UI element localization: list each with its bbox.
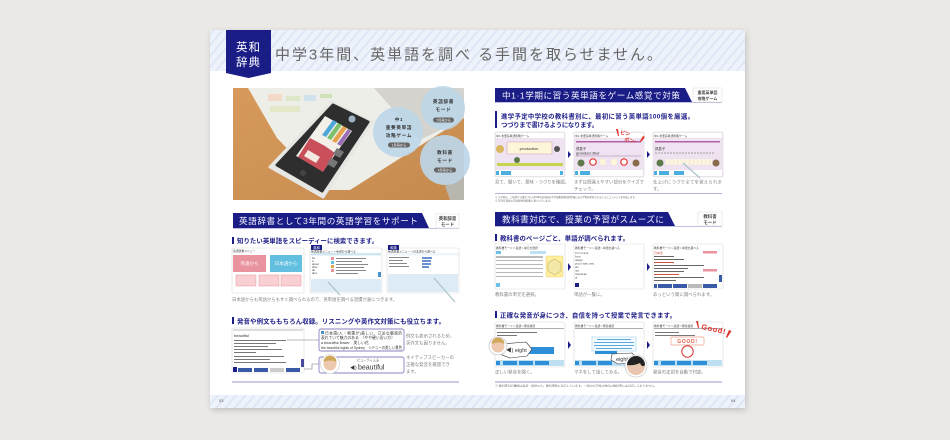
screen: dictionary menu: 英語辞書メニュー — [233, 249, 256, 253]
callout: audio — [319, 354, 404, 374]
page number right: 04 — [731, 398, 736, 403]
top hatched band — [210, 30, 745, 71]
mode circle: dictionary: 7月号から — [436, 118, 451, 122]
pronunciation screen 3: 教科書モード＞英語＞発音練習 — [654, 324, 693, 328]
textbook screen 2: American — [575, 272, 587, 276]
mode circle: textbook: 4月号から — [438, 168, 452, 172]
section header: game: 攻略ゲーム — [698, 95, 717, 101]
exclamation: Good!: Good! — [701, 322, 727, 336]
section header: textbook: モード — [703, 220, 717, 225]
textbook screen 3: 日本語 — [654, 251, 663, 255]
game screen 3 — [653, 132, 723, 178]
arrow — [647, 151, 650, 158]
game screen 2: 中1·重要英単語攻略ゲーム — [575, 134, 608, 138]
caption: pronunciation 1: 正しい発音を聞く。 — [495, 368, 535, 376]
mode circle: game: 1月号から — [392, 142, 406, 148]
mode circle: textbook — [420, 135, 470, 185]
textbook screen 2: am — [575, 265, 580, 269]
subheading: 100 words: 進学予定中学校の教科書別に、最初に習う英単語100個を厳選。 — [501, 112, 694, 120]
photo with device and mode circles — [233, 86, 470, 200]
divider right — [495, 381, 722, 383]
screen: dictionary entry: beautiful — [234, 333, 249, 338]
arrow — [647, 263, 650, 271]
caption: pronunciation 3: 発音の正誤を自動で判定。 — [653, 368, 706, 376]
subheading: textbook pages: 教科書のページごと、単語が調べられます。 — [500, 234, 629, 242]
screen: English-Japanese search: be — [312, 256, 316, 260]
photo: paper shade right — [374, 88, 464, 140]
note: example sentences: 英作文も困りません。 — [406, 340, 450, 346]
note: native pronunciation: ます。 — [406, 368, 419, 375]
game screen 2 — [574, 132, 644, 177]
pronunciation screen 1 — [489, 322, 565, 367]
caption: game 3 — [653, 178, 722, 192]
caption: textbook 2: 単語が一覧に。 — [574, 291, 605, 298]
exclamation: Good! — [696, 321, 732, 338]
callout: audio: ビューティふる — [357, 358, 379, 362]
brochure page — [210, 30, 745, 408]
section header: dictionary support: モード — [441, 222, 454, 227]
photo: table shade — [445, 176, 464, 200]
main title: 中学3年間、英単語を調べ る手間を取らせません。 — [275, 46, 662, 64]
caption: game 1: 見て、聞いて、意味・つづりを確認。 — [495, 178, 569, 186]
game screen 2: grandso□ther — [576, 150, 600, 156]
game screen 1: production — [520, 146, 538, 151]
footnote: game: ※ 入学前は、ご採用から推定される2016年度全国の中学校教科書採択情報におき学習を進められるようにコンテンツを作成します。 — [495, 195, 637, 199]
screen: English-Japanese search — [310, 245, 382, 293]
textbook screen 3 — [653, 244, 723, 289]
screen: English-Japanese search: a — [312, 259, 314, 263]
pronunciation screen 2 — [574, 322, 647, 377]
screen: English-Japanese search: after — [312, 265, 318, 269]
screen: dictionary menu: 英語から — [240, 260, 258, 267]
textbook screen 2: from — [575, 254, 581, 258]
callout: audio: beautiful — [358, 364, 385, 372]
arrow — [568, 263, 571, 271]
mode circle: game — [373, 107, 423, 157]
note: native pronunciation — [406, 354, 454, 375]
footnote: textbook: ※ 教科書対応機能は英語・国語のみ。教科書順に対応しています。一部の中学校の独自の教科書には対応しておりません。 — [495, 384, 657, 388]
section header: textbook — [495, 212, 722, 227]
game screen 3: 孫息子 — [655, 146, 666, 151]
exclamation: correct sound: ピン — [620, 130, 631, 138]
section header: dictionary support: 英語辞書として3年間の英語学習をサポート — [239, 215, 418, 226]
section header: textbook: 教科書 — [703, 213, 717, 220]
pronunciation screen 1: ◀) eight — [506, 347, 527, 354]
section header: game: 重要英単語 — [698, 89, 718, 95]
page number left: 03 — [219, 398, 224, 403]
caption: game 3: す。 — [653, 186, 661, 192]
section header: dictionary support: 英和辞書 — [439, 215, 457, 222]
textbook screen 2: I'm (=I am) — [575, 251, 588, 255]
divider left — [232, 381, 459, 383]
note: native pronunciation: 正確な発音を確認でき — [406, 361, 450, 368]
footnote: game: ※ 2015年発表の学校採択情報(推)に基づいています。 — [495, 198, 552, 202]
callout: example sentences: 日本語(人・物事が)美しい、立派な魅惑的 — [325, 330, 402, 336]
mode circle: game: 重要英単語 — [386, 124, 412, 131]
note: native pronunciation: ネイティブスピーカーの — [406, 354, 454, 361]
subheading: pronunciation and examples: 発音や例文ももちろん収録。リスニングや英作文対策にも役立ちます。 — [237, 316, 445, 326]
caption: search: 日本語からも英語からもすぐ調べられるので、英単語を調べる習慣が身につきます。 — [232, 296, 397, 303]
caption: textbook 1: 教科書の単元を選択。 — [495, 291, 539, 298]
textbook screen 2: not — [575, 268, 579, 272]
caption: game 2 — [574, 178, 645, 192]
textbook screen 2 — [574, 244, 644, 289]
screen: Japanese-English search — [387, 245, 459, 302]
arrow — [568, 341, 571, 349]
mode circle: game: 中1 — [395, 116, 403, 123]
textbook screen 2: Japan — [575, 258, 583, 262]
section header: textbook: 教科書対応で、授業の予習がスムーズに — [502, 214, 664, 224]
screen: English-Japanese search: 英和 — [313, 245, 320, 250]
mode circle: textbook: 教科書 — [437, 149, 453, 156]
callout: example sentences: the beautiful sights of Sydney シドニーの美しい景色 — [321, 345, 402, 350]
pronunciation screen 2: eight — [616, 357, 628, 363]
mode circle: dictionary — [421, 86, 465, 130]
callout: example sentences: a beautiful flower 美しい花 — [321, 340, 369, 345]
screen: Japanese-English search: 和英 — [390, 245, 397, 250]
textbook screen 1: 教科書モード＞英語＞単元を選択 — [496, 246, 538, 250]
connector lines — [287, 340, 320, 369]
screen: English-Japanese search: 英語辞書メニュー＞英語から調べる — [311, 250, 356, 254]
section header: dictionary support — [233, 213, 459, 229]
exclamation: correct sound — [616, 129, 645, 145]
photo: textbook and paper — [248, 88, 464, 190]
pronunciation screen 2: 教科書モード＞英語＞発音練習 — [575, 324, 614, 328]
screen: English-Japanese search: all — [312, 268, 315, 272]
arrow — [647, 341, 650, 349]
photo: device — [270, 102, 372, 197]
callout: audio: ◀) — [350, 366, 357, 372]
textbook screen 2: of — [575, 276, 578, 280]
footnote: game — [495, 195, 637, 202]
subheading: accurate pronunciation: 正確な発音が身につき、自信を持って授業で発言できます。 — [500, 310, 676, 320]
textbook screen 2: 教科書モード＞英語＞単語を調べる — [575, 246, 620, 250]
textbook screen 1 — [495, 244, 565, 289]
subheading: speedy search: 知りたい英単語をスピーディーに検索できます。 — [237, 236, 378, 245]
screen: dictionary entry — [232, 328, 304, 373]
callout: example sentences: 表れていて魅力のある 〈やや硬い言い方〉 — [321, 335, 395, 340]
mode circle: textbook: モード — [437, 158, 453, 163]
section header: game — [495, 88, 722, 103]
mode circle: dictionary: 英語辞書 — [433, 98, 454, 105]
screen: dictionary menu — [232, 248, 304, 293]
pronunciation screen 3: GOOD! — [677, 339, 698, 345]
game screen 2: 孫息子 — [576, 146, 587, 151]
pronunciation screen 3 — [653, 322, 723, 367]
exclamation: correct sound: ポン♪ — [624, 136, 638, 145]
bottom hatched band — [210, 395, 745, 408]
screen: English-Japanese search: about — [312, 262, 319, 266]
screen: dictionary menu: 日本語から — [275, 260, 297, 267]
screen: Japanese-English search: 英語辞書メニュー＞日本語から調べる — [388, 250, 436, 254]
game screen 3: 中1·重要英単語攻略ゲーム — [654, 134, 687, 138]
note: example sentences — [406, 332, 454, 346]
subheading: 100 words — [495, 111, 694, 129]
caption: game 2: まずは間違えやすい部分をクイズで — [574, 178, 645, 186]
textbook screen 3: 教科書モード＞英語＞単語を調べる — [654, 246, 699, 250]
photo: book colour blocks — [268, 94, 332, 112]
callout: example sentences — [319, 329, 404, 351]
game screen 1 — [495, 132, 565, 177]
stylus — [328, 282, 340, 295]
caption: game 2: チェック。 — [574, 186, 596, 192]
category badge: 英和 — [236, 40, 261, 54]
caption: game 3: 仕上げにつづり全てを覚えられま — [653, 178, 722, 186]
note: example sentences: 例文も表示されるため、 — [406, 332, 454, 340]
category badge — [226, 30, 271, 78]
textbook screen 2: you (I was, am) — [575, 262, 594, 266]
caption: textbook 3: あっという間に調べられます。 — [653, 291, 714, 298]
category badge: 辞典 — [236, 55, 261, 69]
pronunciation screen 1: 教科書モード＞英語＞発音練習 — [496, 324, 535, 328]
mode circle: game: 攻略ゲーム — [386, 132, 412, 139]
divider — [495, 192, 722, 195]
section header: game: 中1·1学期に習う英単語をゲーム感覚で対策 — [502, 90, 680, 100]
mode circle: dictionary: モード — [436, 107, 451, 112]
caption: pronunciation 2: マネをして話してみる。 — [574, 368, 622, 376]
game screen 1: 中1·重要英単語攻略ゲーム — [496, 134, 529, 138]
arrow — [568, 151, 571, 158]
screen: English-Japanese search: also — [312, 271, 318, 275]
subheading: 100 words: つづりまで書けるようになります。 — [501, 120, 598, 129]
